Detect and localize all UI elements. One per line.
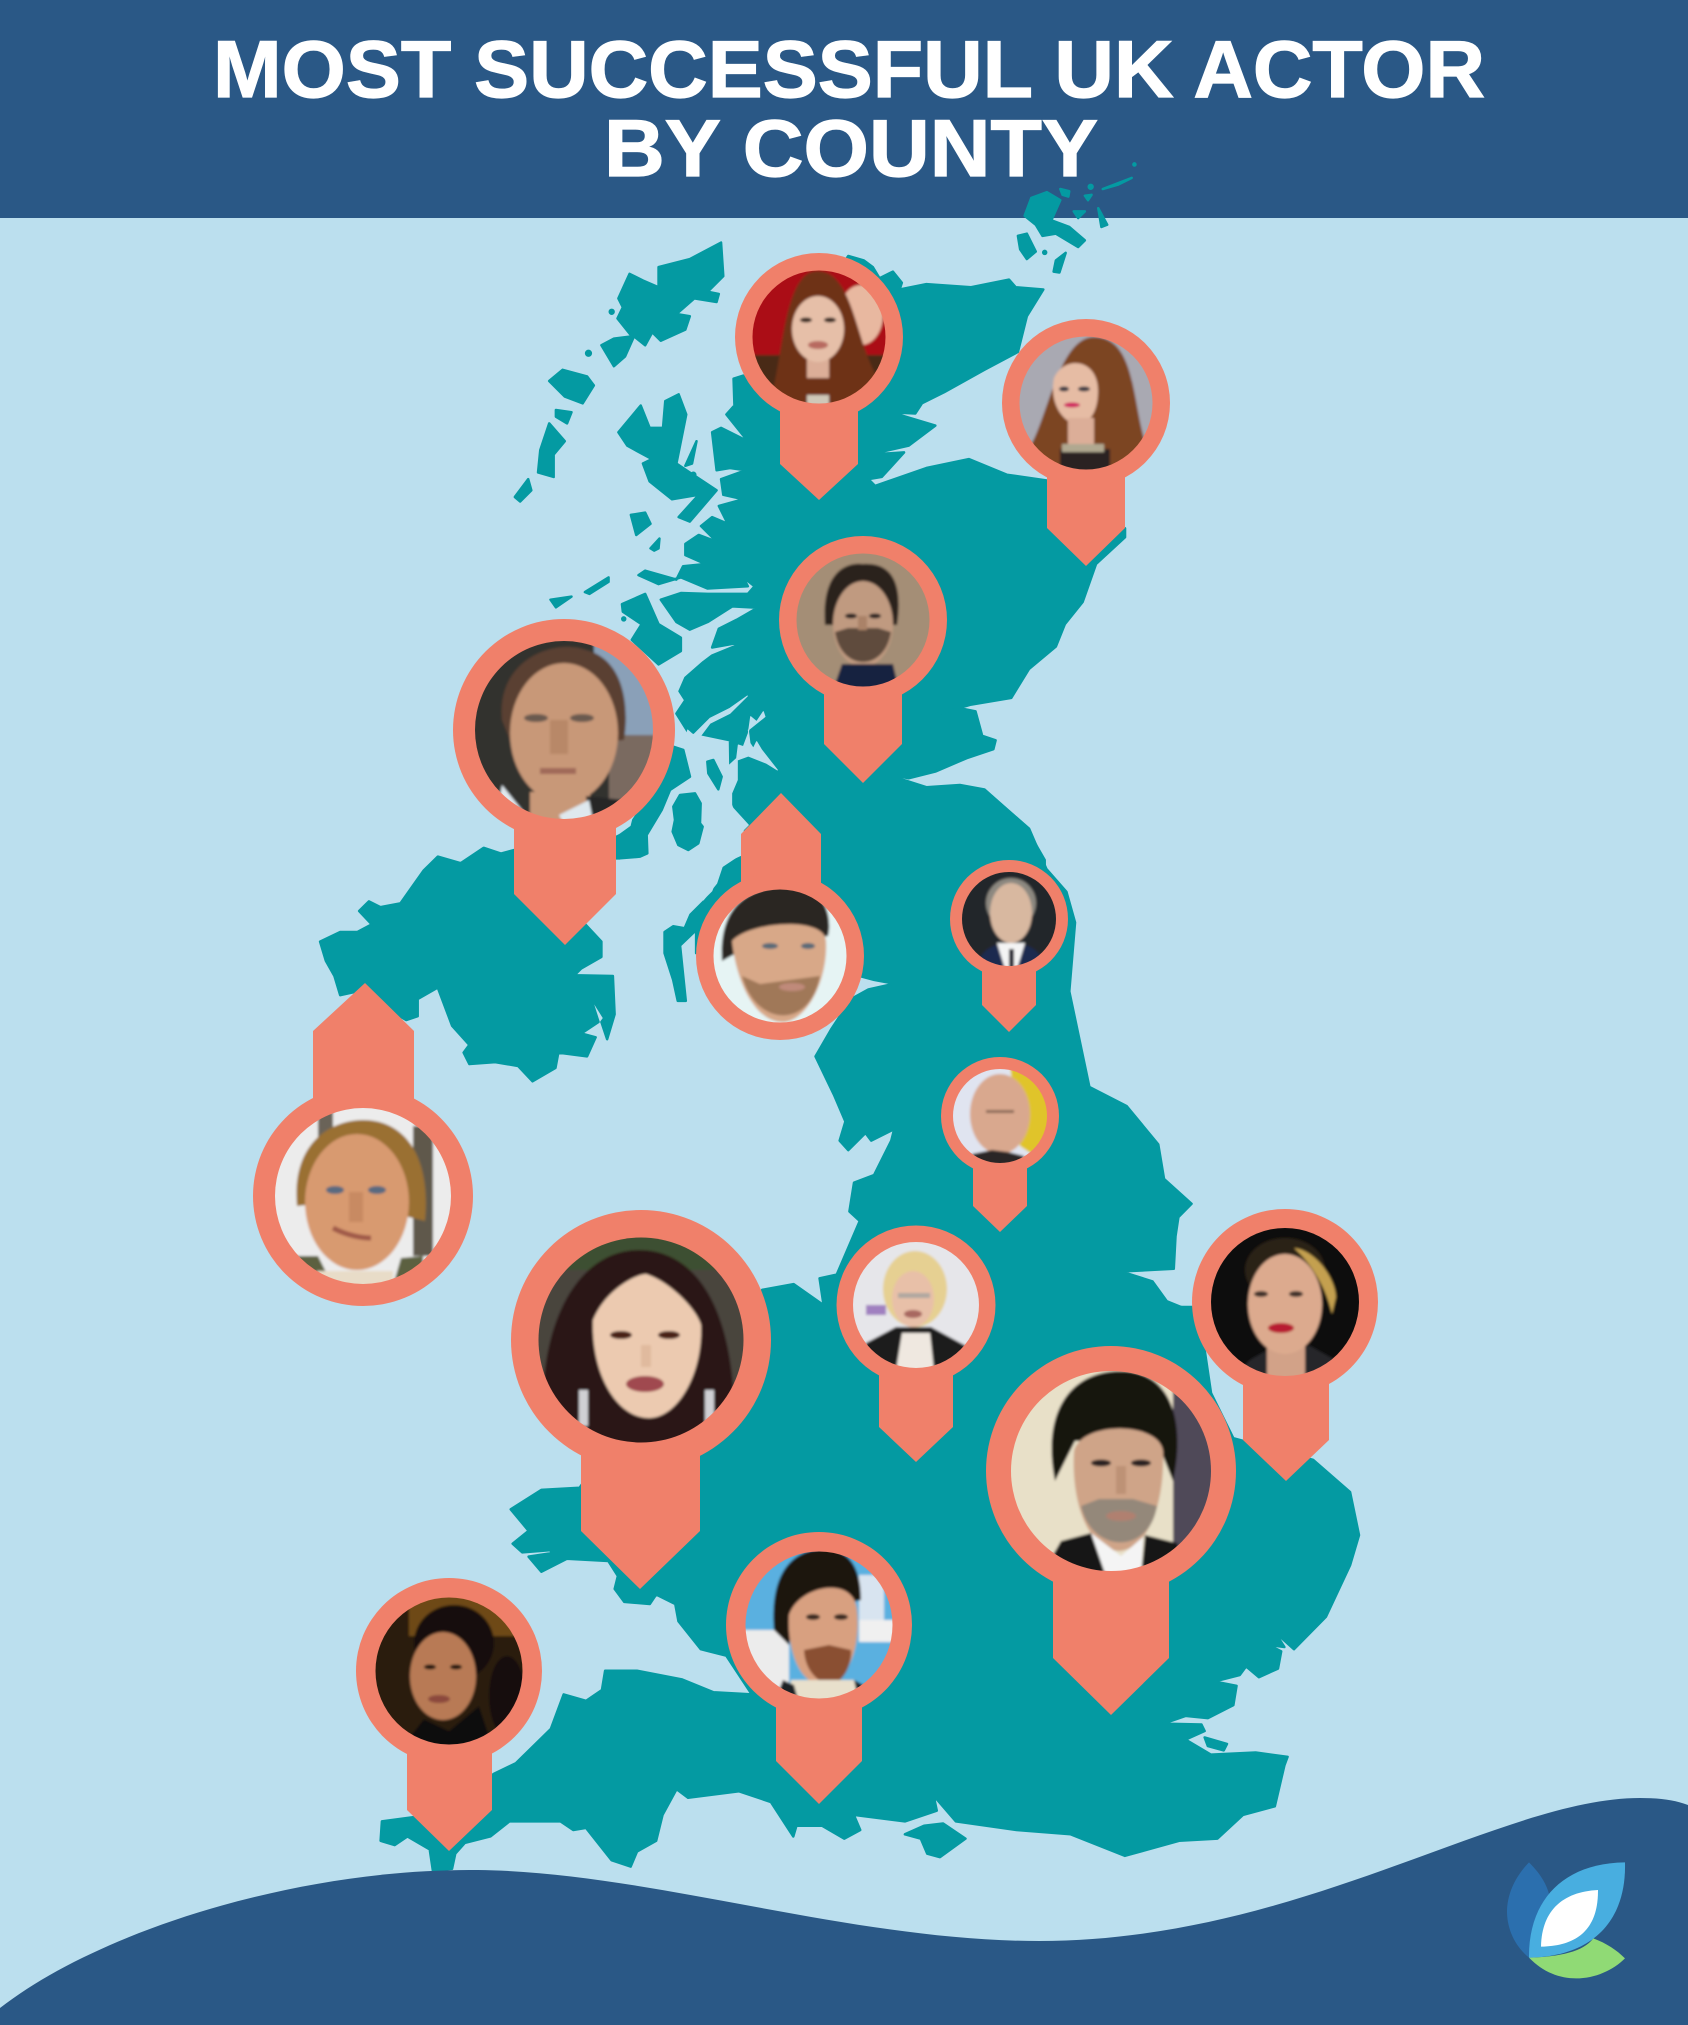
pin: Thandiwe Newton bbox=[356, 1578, 542, 1851]
northern England and north Wales bbox=[665, 796, 1200, 1400]
Mull bbox=[622, 594, 681, 664]
Rum, Coll, Tiree bbox=[631, 513, 651, 535]
pin: James McAvoy bbox=[696, 793, 864, 1040]
Sheppey bbox=[1205, 1737, 1227, 1750]
header band bbox=[0, 0, 1688, 218]
title bbox=[213, 25, 1485, 194]
title: MOST SUCCESSFUL UK ACTOR bbox=[213, 25, 1485, 115]
southern England and Wales bbox=[381, 1307, 1359, 1871]
Kintyre bbox=[610, 747, 690, 858]
pin: Liam Neeson bbox=[453, 619, 675, 945]
pin: Rose Leslie bbox=[1002, 319, 1170, 566]
pin: Olivia Colman bbox=[1192, 1209, 1378, 1481]
pin: Christian Bale bbox=[726, 1532, 912, 1804]
pin: Julie Walters bbox=[836, 1226, 996, 1462]
pin: Sacha Baron Cohen bbox=[986, 1346, 1236, 1715]
footer wave bbox=[0, 1798, 1688, 2025]
Ireland bbox=[320, 848, 615, 1081]
Arran bbox=[673, 793, 703, 850]
pin: David Tennant bbox=[779, 536, 947, 783]
pin: Karen Gillan bbox=[735, 253, 903, 500]
Bute bbox=[707, 760, 722, 789]
Skye bbox=[618, 394, 717, 522]
title: BY COUNTY bbox=[604, 104, 1098, 194]
Isle of Wight bbox=[905, 1824, 965, 1857]
map of the UK bbox=[320, 163, 1359, 1871]
logo bbox=[1507, 1862, 1625, 1978]
pin: Adrian Dunbar bbox=[253, 983, 473, 1306]
Firth of Clyde sea lochs bbox=[620, 696, 777, 900]
Shetland and Orkney bbox=[1025, 192, 1085, 247]
pin: Patrick Stewart bbox=[941, 1057, 1059, 1232]
pin: Catherine Zeta-Jones bbox=[511, 1210, 771, 1589]
Outer Hebrides bbox=[601, 243, 723, 366]
pin: Rowan Atkinson bbox=[950, 860, 1068, 1032]
